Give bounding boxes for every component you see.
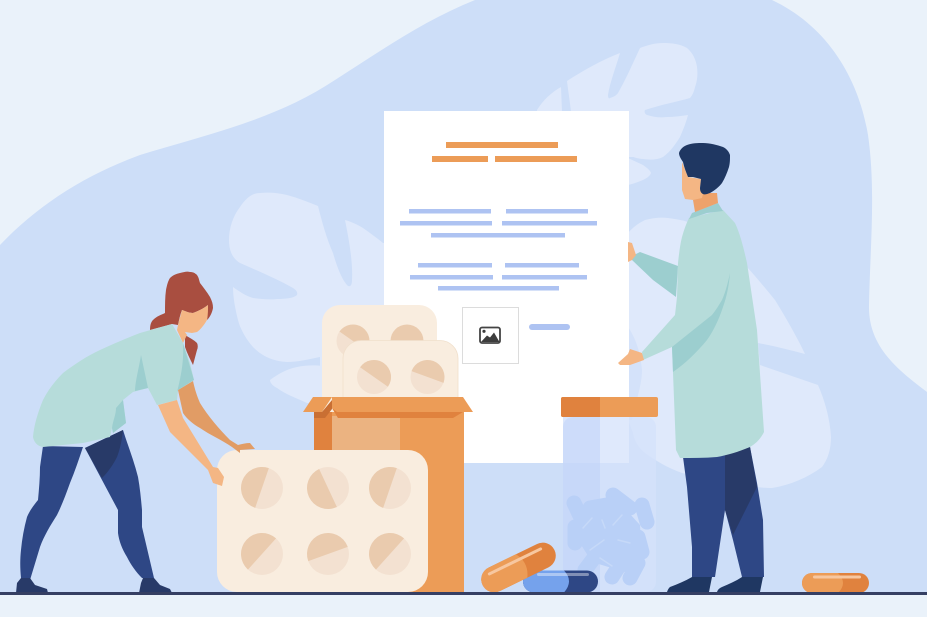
man shoes [667,577,712,592]
man coat [642,210,764,458]
glass jar [561,397,658,592]
woman back leg [20,446,83,580]
man hair [679,143,730,194]
document sheet [384,111,629,463]
document heading lines [432,142,577,162]
capsule: orange tilted [477,538,560,597]
capsule: blue lying [523,570,598,593]
pills [232,461,411,575]
man pharmacist [618,143,764,592]
man hand [618,349,644,365]
back blister pack [322,305,437,425]
man legs [683,455,725,577]
woman face [177,305,208,343]
jar lid [561,397,658,417]
man back arm [632,252,678,297]
leaf: right [628,218,831,488]
woman near arm [158,400,224,486]
woman front leg [85,430,154,578]
leaf: top [537,43,697,185]
jar pills [574,495,647,578]
decorative leaves [229,43,831,488]
image placeholder [462,308,518,364]
document text lines [400,209,597,330]
icon: picture [480,328,500,343]
leaf shade beside document [628,327,642,420]
box flaps [332,397,473,418]
floor line [0,592,927,595]
woman ponytail [185,335,198,365]
woman hair [150,272,213,330]
man neck [693,193,718,212]
woman shirt [33,324,194,447]
capsule: orange right [802,573,869,593]
cardboard box [303,397,473,593]
front upper blister pack [343,340,458,430]
leaf: left [229,193,392,405]
jar pill gaps [583,515,630,566]
woman far arm [178,381,255,453]
woman pharmacist [16,272,255,593]
man collar [689,203,723,219]
man face [682,162,703,200]
woman shoes [16,578,48,593]
large blister pack [217,450,428,592]
